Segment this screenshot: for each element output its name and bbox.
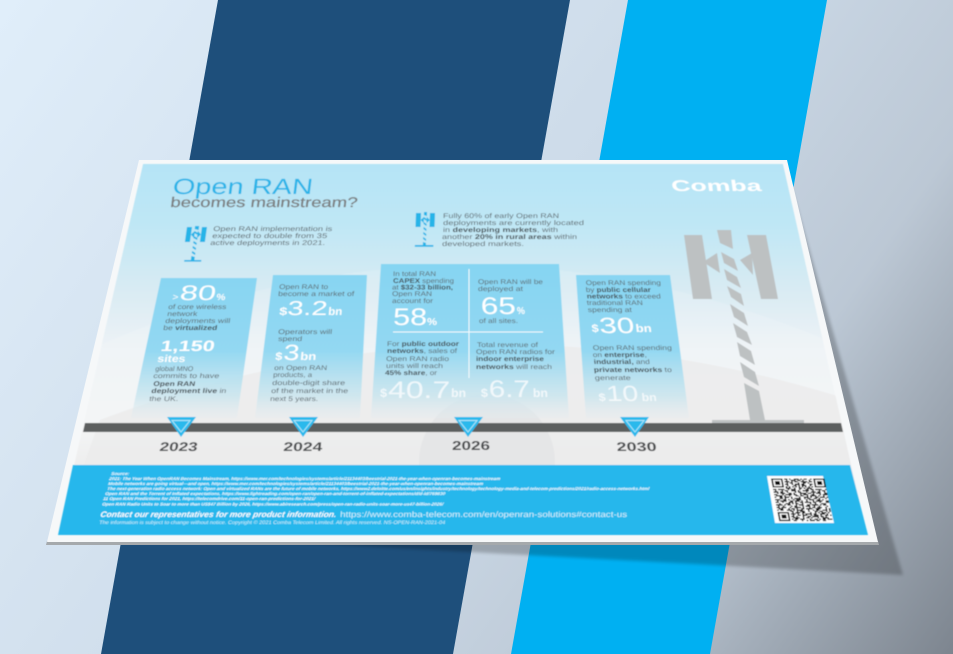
text: RAN CAPEX: account for <box>392 298 434 305</box>
stat: $10bn: $ <box>598 392 606 404</box>
text: market share: products, a <box>273 372 313 379</box>
footer band <box>58 465 868 535</box>
text: core network: network <box>167 311 199 318</box>
stat: >80%: 80 <box>178 282 218 305</box>
text: operators <box>278 329 333 343</box>
stat: $10bn <box>598 381 658 406</box>
stat: 65%: % <box>517 306 525 317</box>
text: public cellular <box>585 280 661 314</box>
year 2023: 2023 <box>159 440 199 454</box>
text: deployment note: Fully 60% of early Open RAN <box>443 213 559 220</box>
card: 2023 <box>131 278 257 418</box>
text: UK deployment: commits to have <box>153 373 220 380</box>
text: UK deployment: Open RAN <box>153 381 196 388</box>
stat: $3bn: $ <box>275 351 283 363</box>
text: implementation note: active deployments in 2021. <box>210 240 326 247</box>
year 2024: 2024 <box>283 440 323 454</box>
stat: >80% <box>172 282 226 305</box>
title <box>170 174 359 210</box>
text: indoor enterprise networks <box>476 342 556 371</box>
stat: 58%: % <box>427 317 437 328</box>
sources: Open RAN Radio Units to Soar to more than US$47 Billion by 2026, https://www.abiresearch.com/press/open-ran-radio-units-soar-more-us47-billion-2026/ <box>102 502 445 506</box>
contact line: https://www.comba-telecom.com/en/openran-solutions#contact-us <box>340 510 627 519</box>
stat: $30bn: bn <box>635 323 653 335</box>
text: public cellular: by public cellular <box>585 287 652 294</box>
text: public outdoor networks: For public outdoor <box>387 341 460 348</box>
text: enterprise spending: private networks to <box>593 367 672 374</box>
stat: $3.2bn: bn <box>328 306 343 318</box>
stat: $3.2bn: $ <box>279 306 288 318</box>
card background <box>131 278 257 418</box>
QR code <box>767 476 834 523</box>
stat: $10bn: 10 <box>605 381 640 406</box>
card: 2024 <box>255 275 367 418</box>
text: core network: deployments will <box>165 318 231 325</box>
stat: $3bn <box>275 340 317 365</box>
text: market share: of the market in the <box>271 388 349 395</box>
text: core network <box>163 304 231 332</box>
stat: >80%: % <box>216 292 226 302</box>
text: deployment note: developed markets. <box>442 241 524 248</box>
year 2026: 2026 <box>452 439 490 453</box>
page background art <box>73 164 859 500</box>
dividers <box>393 269 543 378</box>
text: core network: of core wireless <box>168 304 227 311</box>
stat: $6.7bn: bn <box>533 386 548 400</box>
timeline marker 2030 <box>620 417 649 437</box>
infographic page <box>58 164 868 535</box>
paper sheet <box>46 160 879 545</box>
text: UK deployment <box>149 366 227 403</box>
stat: $40.7bn: 40.7 <box>388 377 450 404</box>
text: public cellular: traditional RAN <box>586 300 643 307</box>
contact line: Contact our representatives for more product information. <box>100 510 337 519</box>
sources: The next-generation radio access network: Open and virtualized RANs are the future of mobile networks, https://www2.deloitte.com/us/en/insights/industry/technology/technology-media-and-telecom-predictions/2021/radio-access-networks.html <box>107 486 651 491</box>
text: operators: Operators will <box>278 329 333 336</box>
stat: 1,150 sites <box>157 338 216 365</box>
text: implementation note: Open RAN implementation is <box>213 226 333 233</box>
sources: 11 Open RAN Predictions for 2021, https://telecomdrive.com/11-open-ran-predictions-for-2021/ <box>103 496 317 501</box>
text: public outdoor networks <box>385 341 460 377</box>
text: enterprise spending: generate <box>594 375 631 382</box>
contact line <box>100 510 627 519</box>
sources: Open RAN and the Torrent of Inflated expectations, https://www.lightreading.com/open-ran/open-ran-and-torrent-of-inflated-expectations/d/d-id/769830 <box>105 491 447 496</box>
title: Open RAN <box>171 174 314 199</box>
text: market intro: become a market of <box>278 291 355 298</box>
text: indoor enterprise networks: Open RAN radios for <box>476 349 556 356</box>
icon: small tower center <box>415 212 435 247</box>
stat: $6.7bn <box>481 376 548 403</box>
sources <box>102 471 651 506</box>
text: market share <box>270 365 349 403</box>
diagonal stripe: dark blue <box>101 0 570 654</box>
card background <box>576 275 689 418</box>
text: public outdoor networks: units will reach <box>386 363 443 370</box>
text: deployment note: deployments are currently located <box>443 220 584 227</box>
text: UK deployment: global MNO <box>155 366 194 373</box>
text: indoor enterprise networks: Total revenue of <box>477 342 538 349</box>
stat: $10bn: bn <box>641 392 658 404</box>
diagonal stripe: cyan <box>511 0 827 654</box>
text: deployment note: another 20% in rural areas within <box>442 234 577 241</box>
stat: >80%: > <box>172 292 179 302</box>
stat: $3.2bn <box>279 298 343 320</box>
timeline bar <box>83 423 843 432</box>
stat: $6.7bn: 6.7 <box>488 376 530 403</box>
text: deployed at: deployed at <box>478 286 523 293</box>
text: deployment note: in developing markets , with <box>443 227 558 234</box>
text: market share: double-digit share <box>272 380 346 387</box>
stat: 58% <box>393 304 437 331</box>
copyright: The information is subject to change without notice. Copyright © 2021 Comba Telecom Limited. All rights reserved. NS-OPEN-RAN-2021-04 <box>99 519 446 526</box>
text: core network: be virtualized <box>163 325 218 332</box>
text: UK deployment: deployment live in <box>151 388 227 395</box>
icon: small tower left <box>182 226 207 262</box>
text: public cellular: Open RAN spending <box>585 280 661 287</box>
text: RAN CAPEX: In total RAN <box>393 271 436 278</box>
text: enterprise spending: Open RAN spending <box>592 345 672 352</box>
stat: 65%: 65 <box>480 293 516 320</box>
stat: 1,150 sites: 1,150 <box>159 338 216 355</box>
text: RAN CAPEX: Open RAN <box>392 291 432 298</box>
text: public cellular: spending at <box>587 307 632 314</box>
text: deployed at <box>478 279 543 293</box>
stat: $3.2bn: 3.2 <box>287 298 328 320</box>
text: public outdoor networks: 45% share , or <box>385 370 438 377</box>
text: enterprise spending <box>592 345 672 382</box>
text: implementation note <box>210 226 333 247</box>
title: becomes mainstream? <box>170 194 359 210</box>
stat: $3bn: 3 <box>283 340 301 365</box>
stat: $40.7bn <box>380 377 466 404</box>
text: public outdoor networks: Open RAN radio <box>386 356 449 363</box>
stat: 65% <box>480 293 525 320</box>
text: public outdoor networks: networks , sales of <box>387 348 457 355</box>
text: RAN CAPEX: at $32-33 billion, <box>392 285 453 291</box>
text: implementation note: expected to double from 35 <box>212 233 328 240</box>
text: of all sites: of all sites. <box>479 318 518 325</box>
text: UK deployment: the UK. <box>149 396 179 403</box>
card background <box>255 275 367 418</box>
year 2030: 2030 <box>616 440 657 454</box>
text: market intro <box>278 284 355 298</box>
text: indoor enterprise networks: indoor enterprise <box>476 356 544 363</box>
card background <box>371 264 569 418</box>
stat: $30bn: $ <box>591 323 599 335</box>
text: market intro: Open RAN to <box>279 284 329 291</box>
stat: $30bn: 30 <box>598 313 636 338</box>
text: RAN CAPEX: CAPEX spending <box>393 278 454 285</box>
stat: $30bn <box>591 313 653 338</box>
sources: 2021: The Year When OpenRAN Becomes Mainstream, https://www.mer.com/technologies/systems/article/21134403/beestrial-2021-the-year-when-openran-becomes-mainstream <box>108 476 501 481</box>
timeline marker 2026 <box>454 417 483 437</box>
text: public cellular: networks to exceed <box>586 294 661 300</box>
timeline marker 2024 <box>289 417 318 437</box>
stat: 58%: 58 <box>393 304 427 331</box>
stat: $40.7bn: bn <box>451 386 466 400</box>
stat: $40.7bn: $ <box>380 386 388 400</box>
card: 2030 <box>576 275 689 418</box>
timeline marker 2023 <box>167 417 196 437</box>
text: deployed at: Open RAN will be <box>478 279 543 286</box>
text: operators: spend <box>278 336 303 343</box>
text: deployment note <box>442 213 584 248</box>
card: 2026 <box>371 264 569 418</box>
text: enterprise spending: on enterprise , <box>592 352 647 359</box>
text: RAN CAPEX <box>392 271 454 305</box>
logo: Comba: Comba <box>670 178 763 195</box>
stat: $6.7bn: $ <box>481 386 488 400</box>
text: enterprise spending: industrial, and <box>593 359 650 366</box>
stat: 1,150 sites: sites <box>157 354 187 365</box>
stat: $3bn: bn <box>300 351 317 363</box>
text: indoor enterprise networks: networks will reach <box>476 364 552 371</box>
text: market share: on Open RAN <box>274 365 328 372</box>
paper shadow <box>60 165 903 575</box>
sources: Mobile networks are going virtual—and open, https://www.mer.com/technologies/systems/article/21134403/beestrial-2021-the-year-when-openran-becomes-mainstream <box>108 481 484 486</box>
big tower graphic <box>684 230 804 423</box>
sources: Source: <box>111 471 131 476</box>
text: market share: next 5 years. <box>270 396 319 403</box>
